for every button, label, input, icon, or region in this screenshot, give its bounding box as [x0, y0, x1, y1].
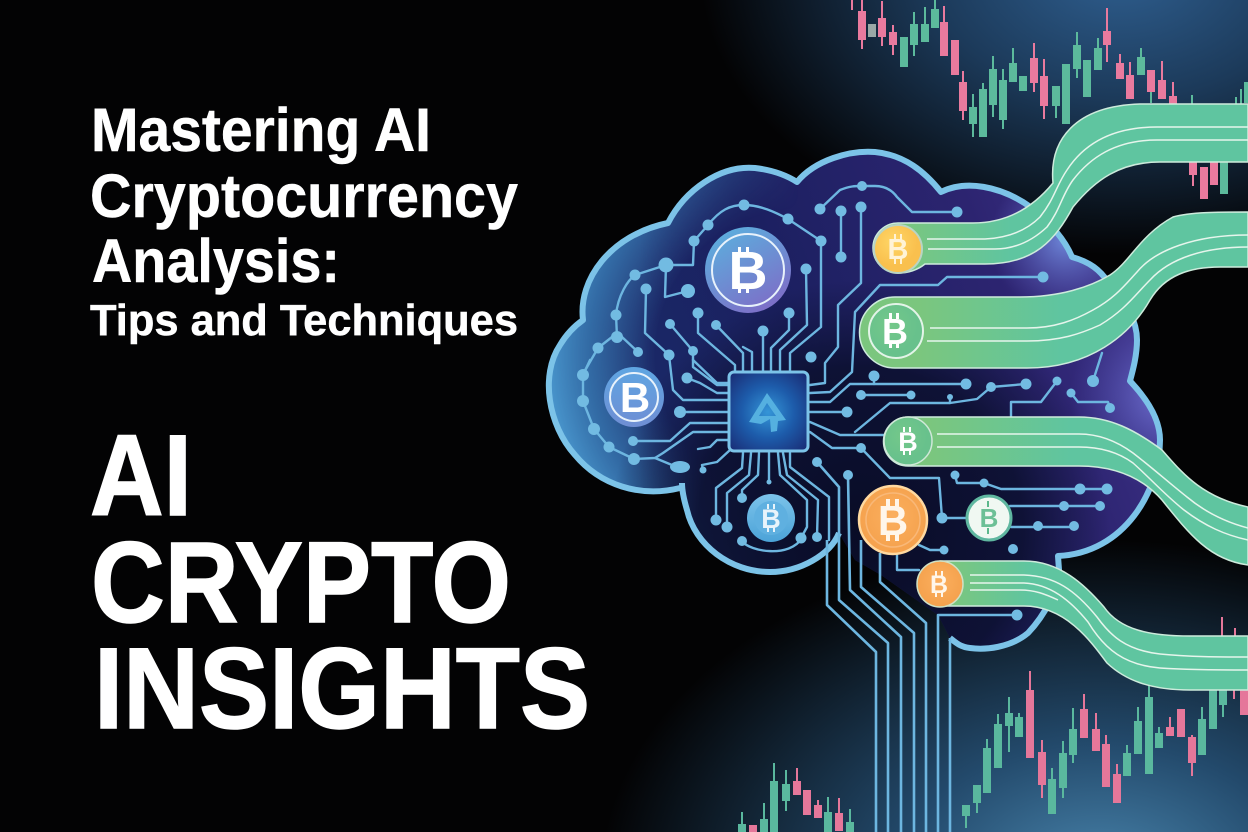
coin: white and green bitcoin: [967, 496, 1011, 540]
candlestick chart: bottom right: [738, 617, 1248, 832]
coin: small green bitcoin: B: [898, 427, 918, 457]
heading: AI Crypto Insights: AI: [90, 412, 192, 540]
coin: light blue bitcoin: B: [761, 504, 781, 534]
circuit nodes: [577, 181, 1115, 620]
coin: small orange bitcoin: [917, 561, 963, 607]
green data ribbon 1: [873, 104, 1248, 273]
coin: yellow bitcoin: B: [888, 234, 908, 266]
coin: large orange bitcoin: B: [878, 497, 908, 544]
icon: AI arrow mark: [749, 393, 786, 432]
green data ribbon 3: [883, 417, 1248, 565]
heading: article title: Tips and Techniques: [90, 296, 518, 345]
coin: small orange bitcoin: B: [930, 571, 948, 599]
heading: article title: [90, 96, 518, 345]
heading: article title: Mastering AI: [91, 96, 431, 164]
circuit traces: [583, 186, 1110, 570]
coin: large blue bitcoin: B: [728, 241, 768, 301]
coin: large green bitcoin: [869, 304, 923, 358]
bus lines running down from the brain: [817, 462, 1017, 832]
coin: large blue bitcoin: [705, 227, 791, 313]
green data ribbon 4: [922, 561, 1248, 690]
coin: small green bitcoin: [884, 417, 932, 465]
coin: left blue B: [604, 367, 664, 427]
coin: white and green bitcoin: B: [980, 503, 998, 533]
coin: yellow bitcoin: [874, 225, 922, 273]
green data ribbon 2: [860, 212, 1248, 368]
heading: AI Crypto Insights: CRYPTO: [91, 519, 511, 647]
heading: article title: Cryptocurrency: [90, 162, 518, 230]
coin: light blue bitcoin: [747, 494, 795, 542]
brain silhouette: [530, 140, 1180, 660]
candlestick chart: top right: [852, 0, 1248, 199]
central AI chip: [729, 372, 808, 451]
coin: left blue B: B: [620, 374, 650, 421]
heading: AI Crypto Insights: [90, 412, 590, 753]
heading: article title: Analysis:: [92, 227, 340, 295]
heading: AI Crypto Insights: INSIGHTS: [94, 625, 590, 753]
coin: large green bitcoin: B: [882, 311, 908, 352]
coin: large orange bitcoin: [859, 486, 927, 554]
